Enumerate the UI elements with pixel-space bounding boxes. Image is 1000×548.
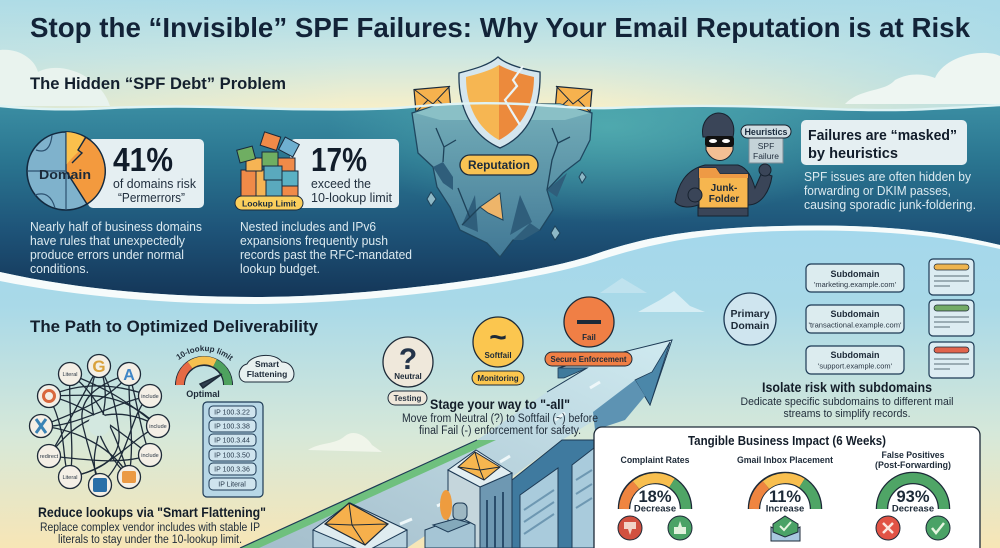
icon: right envelope: [555, 86, 592, 115]
road arrow: [240, 340, 672, 548]
pill: reputation: [460, 155, 538, 175]
stat caption: 10-lookup limit: [311, 191, 393, 205]
IP labels: IP 100.3.44: [214, 438, 250, 444]
metric: false positives: (Post-Forwarding): [875, 460, 951, 470]
illustration: masked hacker: [675, 113, 791, 216]
gauge: 10-lookup limit: 10-lookup limit: [176, 345, 233, 361]
panel: 41 percent stat: [27, 132, 204, 276]
gauge: 10-lookup limit: Optimal: [186, 389, 220, 399]
text block: isolate risk: [740, 379, 954, 420]
background: water band: [0, 103, 1000, 304]
body text: Nearly half of business domains: [30, 219, 202, 234]
callout body: SPF issues are often hidden by: [804, 169, 971, 184]
network curves: [41, 366, 158, 485]
heading: path to optimized deliverability: The Path to Optimized Deliverability: [30, 317, 319, 336]
pill: lookup limit: [235, 196, 303, 210]
buildings: [313, 440, 596, 548]
text block: stage your way: final Fail (-) enforcement for safety.: [419, 425, 581, 437]
text block: smart flattening: Reduce lookups via "Smart Flattening": [38, 504, 266, 520]
stat card: 17%: [290, 139, 399, 208]
illustration: road arrow and buildings: [240, 340, 672, 548]
icon: stacked lookup blocks: [237, 132, 299, 200]
body text: Nested includes and IPv6: [240, 219, 376, 234]
stage: softfail: Softfail: [484, 351, 512, 360]
network nodes: [30, 354, 170, 496]
icon: junk folder: [699, 168, 748, 208]
subdomain: support: Subdomain: [830, 350, 880, 360]
stat card: 41%: [88, 139, 204, 208]
stage: neutral: Neutral: [394, 372, 422, 381]
network hub: [88, 414, 110, 436]
subdomain: marketing: [806, 264, 904, 292]
stat: 41%: 41%: [113, 141, 173, 178]
primary domain circle: Domain: [731, 320, 769, 332]
pill: lookup limit: Lookup Limit: [242, 198, 296, 208]
stage: softfail: Monitoring: [477, 374, 519, 383]
body text: have rules that unexpectedly: [30, 233, 185, 248]
primary domain circle: [724, 293, 776, 345]
callout body: [804, 169, 976, 212]
callout heading: [808, 128, 957, 162]
body text: records past the RFC-mandated: [240, 247, 412, 262]
document: red: [929, 342, 974, 378]
text block: stage your way: Stage your way to "-all": [430, 396, 570, 412]
paper: SPF failure: [749, 137, 783, 163]
callout heading: Failures are “masked”: [808, 128, 957, 144]
stage: neutral: ?: [399, 343, 417, 376]
metric: false positives: 93%: [896, 488, 930, 506]
waterline across iceberg: [0, 103, 1000, 110]
text block: isolate risk: Dedicate specific subdomains to different mail: [740, 396, 954, 408]
hacker head: [703, 113, 734, 160]
title: Stop the “Invisible” SPF Failures: Why Your Email Reputation is at Risk: [30, 12, 970, 43]
heading: hidden SPF debt: The Hidden “SPF Debt” Problem: [30, 74, 286, 93]
metric: false positives: False Positives: [882, 450, 944, 460]
document: yellow: [929, 259, 974, 295]
callout body: causing sporadic junk-foldering.: [804, 197, 976, 212]
subdomain: marketing: Subdomain: [830, 269, 880, 279]
hand: [759, 164, 771, 176]
primary domain circle: Primary: [730, 308, 770, 320]
document: green: [929, 300, 974, 336]
subdomain: transactional: [806, 305, 904, 333]
gauge: 10-lookup limit: [175, 345, 233, 399]
IP labels: IP 100.3.38: [214, 424, 250, 430]
icon: building envelope large: [325, 503, 388, 545]
metric: complaint rates: [618, 455, 692, 540]
metric: complaint rates: Decrease: [634, 504, 676, 514]
impact heading: Tangible Business Impact (6 Weeks): [688, 433, 886, 448]
IP labels: IP 100.3.36: [214, 466, 250, 474]
pill: heuristics: Heuristics: [744, 127, 788, 137]
IP labels: [214, 410, 250, 488]
hand on folder: [688, 188, 702, 202]
network node labels: include: [141, 394, 159, 400]
stage: fail: [545, 297, 632, 366]
IP labels: IP Literal: [218, 482, 246, 488]
stage: neutral: [383, 337, 433, 405]
network node labels: G: [92, 357, 106, 376]
callout heading: by heuristics: [808, 146, 898, 162]
stage: neutral: Testing: [394, 394, 422, 403]
subdomain: support: 'support.example.com': [818, 362, 893, 370]
panel: tangible business impact: [594, 427, 980, 548]
callout body: forwarding or DKIM passes,: [804, 183, 951, 198]
icon: cracked domain globe: [27, 132, 105, 210]
paper: SPF failure: Failure: [753, 151, 779, 161]
illustration: iceberg with shield: [0, 57, 1000, 257]
network node labels: redirect: [40, 454, 59, 460]
stat caption: of domains risk: [113, 177, 197, 191]
IP labels: IP 100.3.50: [214, 452, 250, 460]
metric: false positives: Decrease: [892, 504, 934, 514]
callout card: [801, 120, 967, 165]
network node labels: Literal: [63, 475, 77, 481]
stage: fail: Secure Enforcement: [550, 355, 627, 364]
body text: [240, 219, 412, 276]
stage: softfail: [472, 317, 524, 385]
subdomain: marketing: 'marketing.example.com': [814, 280, 897, 289]
icon: junk folder: Folder: [709, 194, 739, 205]
text block: stage your way: [402, 396, 598, 437]
paper: SPF failure: SPF: [758, 141, 774, 151]
text block: smart flattening: Replace complex vendor includes with stable IP: [40, 522, 260, 534]
background: sky: [0, 0, 1000, 112]
body text: produce errors under normal: [30, 247, 184, 262]
icon: left envelope: [414, 86, 451, 114]
stat caption: [311, 177, 393, 205]
icon: cracked domain globe: Domain: [39, 167, 91, 182]
stat caption: [113, 177, 197, 205]
diagram: tangled includes network: [30, 354, 170, 496]
IP labels: IP 100.3.22: [214, 410, 250, 416]
icon: cracked shield: [459, 57, 540, 148]
subdomain: transactional: Subdomain: [830, 309, 880, 319]
cloud: smart flattening: Smart: [255, 359, 279, 369]
network node labels: A: [123, 367, 135, 384]
figure on roof: [433, 490, 470, 532]
network node labels: Literal: [63, 372, 77, 378]
panel: 17 percent stat: [235, 132, 412, 276]
stat caption: “Permerrors”: [118, 191, 185, 205]
body text: expansions frequently push: [240, 233, 388, 248]
cloud: smart flattening: Flattening: [247, 369, 287, 379]
metric: complaint rates: 18%: [638, 488, 672, 506]
cloud: smart flattening: [239, 355, 294, 382]
metric: gmail inbox placement: Increase: [766, 504, 804, 514]
metric: complaint rates: Complaint Rates: [620, 455, 690, 465]
IP pills: [209, 406, 256, 490]
icon: building envelope small: [458, 452, 500, 480]
text block: stage your way: Move from Neutral (?) to Softfail (~) before: [402, 413, 598, 425]
text block: isolate risk: Isolate risk with subdomains: [762, 379, 932, 395]
subdomain: transactional: 'transactional.example.com': [808, 320, 902, 330]
stage: fail: Fail: [582, 333, 596, 342]
iceberg body: [412, 104, 592, 257]
text block: isolate risk: streams to simplify records.: [784, 408, 910, 420]
stage: softfail: ~: [489, 321, 507, 354]
body text: lookup budget.: [240, 261, 320, 276]
text block: smart flattening: literals to stay under the 10-lookup limit.: [58, 534, 242, 546]
network node labels: [40, 357, 167, 481]
diagram: subdomains: [724, 259, 974, 378]
impact card: [594, 427, 980, 548]
background: lower section: [0, 225, 1000, 548]
stat: 17%: 17%: [311, 141, 367, 178]
body text: conditions.: [30, 261, 89, 276]
hacker body: [675, 165, 772, 216]
network node labels: include: [149, 424, 167, 430]
stat caption: exceed the: [311, 177, 371, 191]
text block: smart flattening: [38, 504, 266, 546]
metric: gmail inbox placement: Gmail Inbox Placement: [737, 455, 833, 465]
icon: junk folder: Junk-: [711, 183, 737, 194]
panel: IP literals list: [203, 402, 263, 497]
metric: gmail inbox placement: 11%: [769, 488, 801, 506]
network node labels: include: [141, 453, 159, 459]
metric: gmail inbox placement: [737, 455, 833, 541]
pill: reputation: Reputation: [468, 158, 530, 172]
vendor glyphs: [36, 390, 136, 492]
body text: [30, 219, 202, 276]
subdomain: support: [806, 346, 904, 374]
callout: failures masked: [801, 120, 976, 212]
metric: false positives: [875, 450, 951, 540]
